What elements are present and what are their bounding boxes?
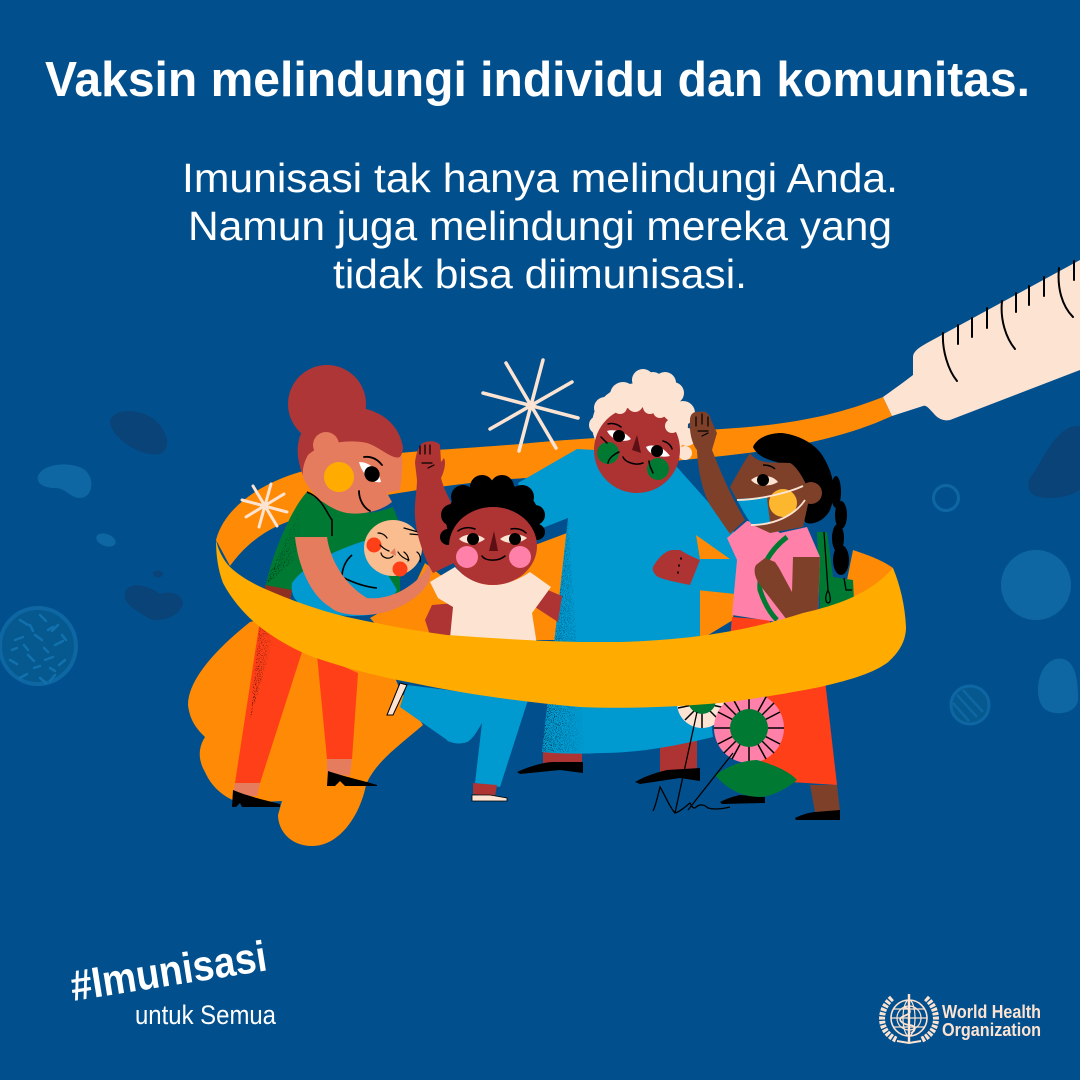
child face — [449, 507, 537, 585]
backpack strap — [760, 537, 787, 620]
mother hair bun — [288, 365, 366, 443]
subtitle text block: tidak bisa diimunisasi. — [333, 251, 747, 297]
girl face — [730, 453, 810, 533]
orange panels behind people — [370, 530, 893, 640]
child legs — [400, 685, 528, 787]
girl leg — [810, 785, 840, 812]
sparkle: small — [242, 484, 287, 527]
WHO emblem — [882, 994, 936, 1043]
child raised shoe — [387, 683, 407, 715]
syringe — [883, 260, 1080, 420]
WHO wordmark: Organization — [942, 1019, 1041, 1040]
mother arm holding baby — [295, 537, 431, 615]
mother hair — [298, 407, 403, 480]
flowers and signature — [653, 678, 797, 813]
baby head — [364, 520, 422, 576]
girl braid — [831, 476, 849, 575]
sparkle: large — [483, 360, 578, 451]
mother face — [303, 441, 402, 514]
child foot and shoe — [473, 783, 497, 796]
WHO logo — [882, 994, 1041, 1043]
campaign hashtag logo: untuk Semua — [135, 1000, 277, 1030]
WHO wordmark: World Health — [942, 1001, 1041, 1022]
girl skirt — [760, 680, 837, 785]
stems and signature — [653, 712, 733, 813]
grandmother dress — [518, 449, 745, 754]
baby swaddle — [292, 540, 397, 616]
girl pink shirt — [727, 521, 820, 622]
grandmother legs — [543, 738, 697, 774]
child hair — [440, 475, 545, 558]
subtitle text block: Imunisasi tak hanya melindungi Anda. — [182, 155, 898, 201]
campaign hashtag logo: #Imunisasi — [67, 932, 270, 1011]
front ribbon band — [216, 540, 906, 708]
girl raised arm and hand — [690, 411, 745, 534]
subtitle text block — [182, 155, 898, 297]
back ribbon band from syringe — [216, 397, 892, 566]
grandmother eyes and smile — [607, 430, 670, 457]
child raised arm and hand — [415, 441, 460, 573]
mother green shirt — [265, 492, 400, 600]
mother shoes — [232, 771, 377, 807]
title: Vaksin melindungi individu dan komunitas. — [45, 53, 1030, 107]
figure: grandmother — [517, 369, 745, 784]
grandmother cheeks — [597, 442, 619, 464]
figure: girl with mask and backpack — [690, 411, 854, 820]
backpack — [817, 532, 854, 610]
girl shoes — [720, 795, 840, 820]
child right arm — [535, 588, 562, 622]
figure: mother and baby — [232, 365, 431, 807]
girl hair — [753, 433, 834, 524]
grandmother hair — [589, 369, 696, 467]
child small arm — [425, 603, 455, 640]
big orange ribbon blob — [188, 610, 423, 846]
mother left leg — [235, 620, 302, 783]
leaf — [715, 760, 797, 797]
grandmother hand — [653, 550, 700, 585]
girl cheek — [769, 489, 797, 517]
grandmother sleeve — [692, 558, 745, 595]
background virus shapes and blobs — [0, 411, 1080, 724]
grandmother face — [594, 407, 680, 493]
mother eye — [359, 462, 381, 482]
WHO wordmark — [942, 1001, 1041, 1040]
grandmother shoes — [517, 762, 700, 784]
girl eye — [751, 476, 778, 486]
pink flower — [714, 693, 784, 763]
mother right leg — [317, 655, 358, 759]
mother shirt hem — [265, 585, 292, 602]
child t-shirt — [430, 567, 551, 645]
girl arm — [755, 557, 820, 620]
subtitle text block: Namun juga melindungi mereka yang — [188, 203, 892, 249]
white flower — [677, 678, 727, 728]
figure: child — [387, 441, 562, 801]
girl mask — [737, 497, 770, 525]
